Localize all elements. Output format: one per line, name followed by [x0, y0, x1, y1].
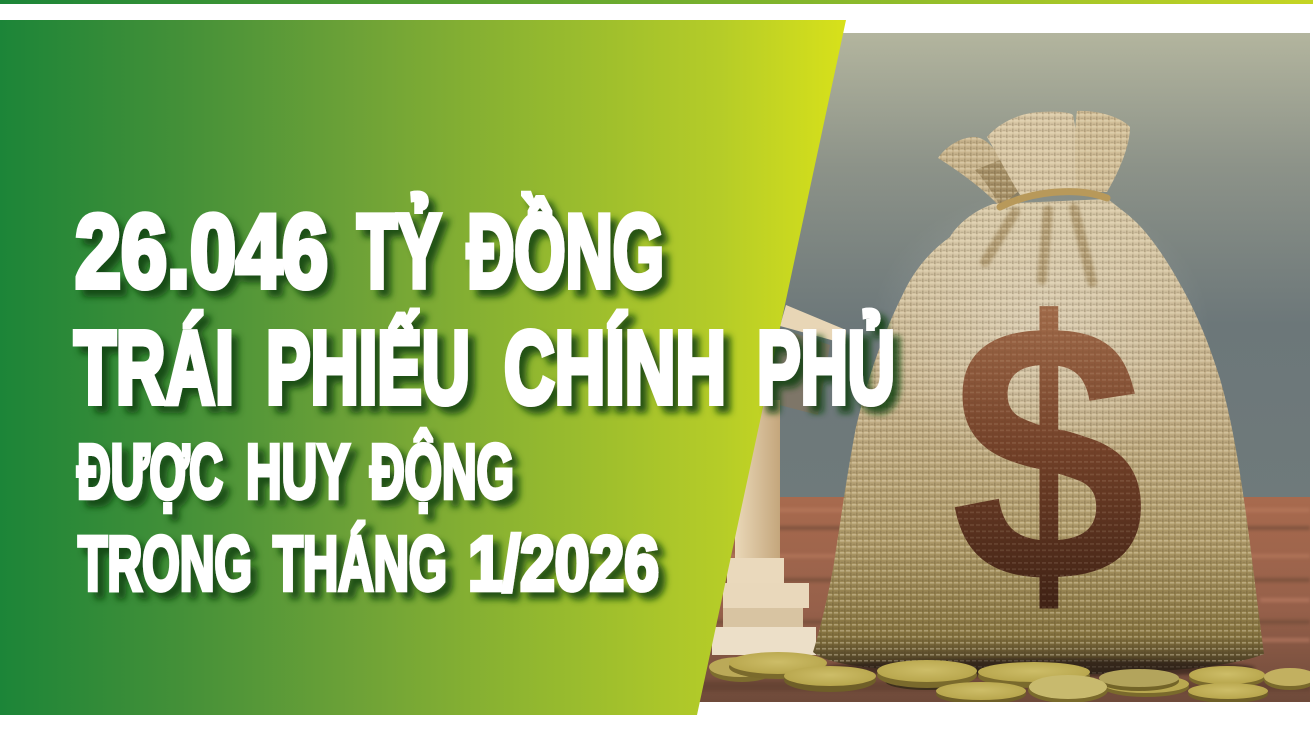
gold coins: [709, 652, 1313, 704]
headline text: [74, 193, 895, 607]
headline line 1: 26.046: [75, 194, 328, 310]
headline line 3: ĐỘNG: [370, 428, 514, 515]
headline line 4: TRONG: [78, 521, 252, 607]
headline line 2: PHỦ: [757, 309, 895, 425]
headline line 1: ĐỒNG: [467, 194, 664, 310]
green gradient panel: [0, 20, 846, 715]
headline line 2: CHÍNH: [504, 310, 726, 425]
bag highlight: [918, 236, 1162, 432]
headline line 3: [77, 428, 514, 515]
money bag: [800, 100, 1280, 685]
headline line 1: TỶ: [357, 193, 441, 310]
headline line 3: ĐƯỢC: [77, 429, 223, 515]
weave texture: [800, 100, 1280, 685]
shadow under bag: [825, 659, 1255, 677]
dollar sign weave overlay: $: [950, 246, 1146, 660]
dollar sign printed on bag: $: [950, 246, 1146, 660]
headline line 4: 1/2026: [468, 521, 659, 607]
headline line 2: [74, 309, 895, 425]
wooden table: [690, 497, 1310, 702]
headline line 2: PHIẾU: [266, 310, 470, 425]
photo background wall: [780, 33, 1310, 497]
wooden column: [712, 305, 846, 655]
bag top ruffle lobes: [938, 111, 1130, 207]
headline line 4: THÁNG: [273, 520, 447, 607]
headline line 2: TRÁI: [74, 310, 234, 425]
bag neck folds: [985, 208, 1092, 282]
headline line 3: HUY: [246, 429, 350, 515]
headline line 1: [75, 193, 664, 310]
bag body: [813, 199, 1264, 674]
rope: [1000, 192, 1107, 207]
top gradient strip: [0, 0, 1313, 4]
photo: money bag on a table: [690, 33, 1313, 704]
headline line 4: [78, 520, 659, 607]
